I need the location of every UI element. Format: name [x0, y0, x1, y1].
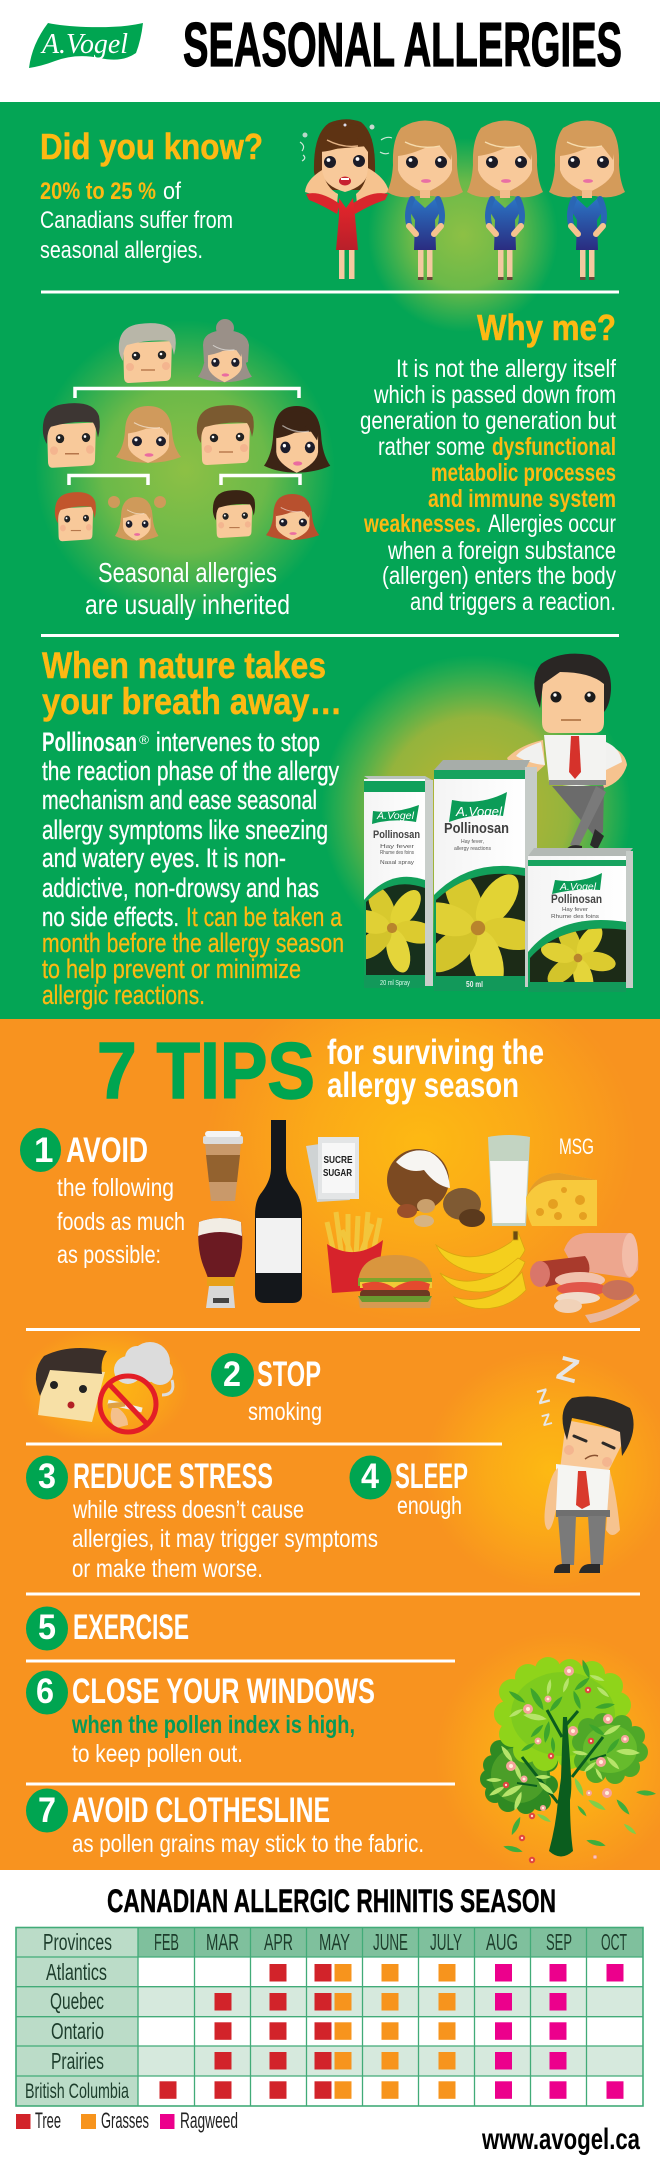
text: product description: allergy symptoms like sneezing [42, 815, 328, 845]
number badge 5 [26, 1606, 68, 1650]
row: Ontario [51, 2018, 566, 2044]
heading: 7 tips [97, 1026, 544, 1115]
heading: avoid clothesline: AVOID CLOTHESLINE [72, 1791, 330, 1830]
icon: sugar packets: SUCRE [324, 1155, 353, 1166]
product: pollinosan tablets box: Rhume des foins [551, 914, 599, 920]
tip 6: close your windows [26, 1670, 375, 1768]
panel: pollinosan [42, 645, 633, 1010]
face: boy dark hair [213, 490, 255, 538]
header band [0, 0, 660, 102]
heading: sleep: SLEEP [395, 1457, 468, 1496]
legend: Ragweed [180, 2108, 238, 2133]
text: explanation: and triggers a reaction. [410, 588, 616, 616]
icon: hamburger [358, 1255, 432, 1308]
text: statistic: Canadians suffer from [40, 207, 233, 234]
text: foods advice: the following [57, 1174, 174, 1202]
heading: when nature takes your breath away [42, 645, 342, 722]
product: pollinosan 50 ml box: Pollinosan [444, 820, 509, 837]
tip 4: sleep [350, 1349, 634, 1573]
face: girl red hair [266, 494, 319, 540]
heading: 7 tips: 7 TIPS [97, 1026, 315, 1115]
row: Ontario: Ontario [51, 2018, 104, 2044]
face: boy red hair [55, 492, 96, 541]
number badge 2: 2 [223, 1355, 241, 1394]
text: statistic: of [163, 178, 181, 205]
icon: sleepy man: Z [534, 1385, 552, 1409]
panel: orange tips background [0, 963, 660, 1882]
face: father brown hair [197, 405, 254, 465]
product: pollinosan nasal spray box: Hay fever [380, 844, 415, 850]
text: explanation: It is not the allergy itself [396, 355, 616, 383]
text: stress advice: or make them worse. [72, 1555, 263, 1583]
text: explanation: weaknesses. [363, 510, 481, 538]
heading: when nature takes your breath away: your breath away… [42, 681, 342, 722]
text: smoking: smoking [248, 1398, 322, 1426]
table header row: AUG [486, 1929, 518, 1955]
icon: coffee cup [203, 1131, 243, 1201]
text: foods advice: foods as much [57, 1208, 185, 1236]
number badge 2 [211, 1353, 254, 1397]
text: product description: intervenes to stop [156, 727, 320, 757]
text: stress advice: while stress doesn’t cause [72, 1496, 304, 1524]
product: pollinosan nasal spray box: Pollinosan [373, 829, 420, 841]
number badge 6: 6 [36, 1672, 54, 1711]
icon: beer glass [198, 1218, 242, 1308]
product: pollinosan 50 ml box: allergy reactions [454, 846, 491, 852]
heading: when nature takes your breath away: When nature takes [42, 645, 326, 686]
text: pollen index: to keep pollen out. [72, 1740, 243, 1768]
number badge 1: 1 [34, 1131, 53, 1170]
text: product description: ® [139, 733, 149, 747]
text: foods advice: as possible: [57, 1241, 161, 1269]
text: pollen index [71, 1711, 355, 1768]
number badge 1 [20, 1128, 61, 1172]
icon: flowering tree [480, 1657, 656, 1863]
text: product description: to help prevent or minimize [42, 954, 301, 984]
icon: sleepy man: Z [553, 1349, 583, 1391]
icon: standing businessman [507, 654, 627, 852]
text: statistic: seasonal allergies. [40, 237, 203, 264]
text: statistic [40, 178, 233, 264]
text: product description: and watery eyes. It is non- [42, 843, 286, 873]
text: pollen on fabric: as pollen grains may stick to the fabric. [72, 1830, 424, 1858]
legend: Grasses [101, 2108, 149, 2133]
text: explanation [360, 355, 616, 616]
heading: avoid: AVOID [66, 1131, 148, 1170]
text: product description: month before the allergy season [42, 928, 344, 958]
icon: bananas [436, 1231, 526, 1309]
product: pollinosan nasal spray box: 20 ml Spray [380, 980, 410, 987]
diagram: family tree of faces [43, 319, 330, 620]
row: Atlantics: Atlantics [46, 1959, 107, 1985]
heading: did you know: Did you know? [40, 126, 263, 167]
text: explanation: Allergies occur [488, 510, 616, 538]
heading: exercise: EXERCISE [73, 1608, 189, 1647]
logo: A.Vogel leaf [29, 23, 143, 68]
icon: cold cuts [530, 1233, 640, 1323]
number badge 3: 3 [38, 1457, 56, 1496]
text: product description: mechanism and ease seasonal [42, 785, 317, 815]
row: British Columbia [25, 2080, 624, 2103]
table header row [43, 1929, 627, 1955]
text: product description: the reaction phase of the allergy [42, 756, 339, 786]
bracket: grandparents [75, 388, 299, 398]
heading: reduce stress: REDUCE STRESS [73, 1457, 273, 1496]
product: pollinosan tablets box: A.Vogel [559, 882, 597, 893]
heading: 7 tips: allergy season [327, 1066, 519, 1105]
icon: sleepy man: Z [540, 1411, 554, 1430]
icon: french fries [327, 1212, 383, 1293]
tip 7: avoid clothesline [26, 1788, 424, 1858]
icon: surprised man with crossed-out cigarette [36, 1342, 173, 1432]
table header row: OCT [601, 1929, 627, 1955]
icon: wine bottle [255, 1120, 302, 1303]
text: explanation: dysfunctional [492, 433, 616, 461]
caption: inherited: are usually inherited [85, 589, 290, 620]
product: pollinosan 50 ml box: 50 ml [466, 980, 483, 989]
product: pollinosan nasal spray box: Rhume des foins [380, 850, 414, 856]
icon: glass of milk [488, 1135, 530, 1226]
text: pollen index: when the pollen index is high, [71, 1711, 355, 1739]
row: Prairies [51, 2048, 566, 2074]
table header row: FEB [154, 1929, 179, 1955]
product: pollinosan nasal spray box [364, 776, 433, 988]
product: pollinosan tablets box [528, 848, 633, 998]
table header row: MAY [319, 1929, 350, 1955]
row: Quebec [50, 1988, 566, 2014]
icon: coconut and nuts [387, 1149, 485, 1227]
face: girl blonde pigtails [108, 496, 166, 540]
label: MSG: MSG [559, 1134, 594, 1159]
text: stress advice [72, 1496, 378, 1583]
text: statistic: 20% to 25 % [40, 178, 156, 205]
table header row: JUNE [373, 1929, 408, 1955]
icon: woman in blue 3 [549, 120, 625, 280]
heading: stop: STOP [257, 1355, 321, 1394]
icon: woman in blue 2 [467, 120, 543, 280]
icon: woman in blue 1 [387, 120, 463, 280]
number badge 7: 7 [38, 1791, 56, 1830]
table: season by province [16, 1927, 643, 2106]
face: mother blonde [116, 406, 181, 463]
table header row: MAR [206, 1929, 239, 1955]
face: grandmother [198, 319, 252, 382]
table header row: APR [264, 1929, 293, 1955]
text: stress advice: allergies, it may trigger symptoms [72, 1525, 378, 1553]
product: pollinosan nasal spray box: A.Vogel [376, 811, 415, 822]
product: pollinosan nasal spray box: Nasal spray [380, 860, 415, 866]
icon: sleepy man [534, 1349, 634, 1573]
product: pollinosan 50 ml box [434, 760, 537, 991]
tip 3: reduce stress [26, 1456, 378, 1583]
face: mother dark hair [264, 406, 330, 473]
product: pollinosan 50 ml box: Hay fever, [461, 839, 484, 845]
tip 1: avoid [20, 1120, 640, 1323]
heading: why me: Why me? [477, 307, 616, 348]
caption: inherited: Seasonal allergies [98, 557, 277, 588]
text: product description: addictive, non-drowsy and has [42, 873, 319, 903]
row: Quebec: Quebec [50, 1988, 104, 2014]
product: pollinosan tablets box: Hay fever [562, 907, 588, 913]
tip 2: stop smoking [36, 1342, 322, 1432]
text: product description: Pollinosan [42, 727, 137, 757]
icon: woman in red, stressed [300, 119, 392, 279]
number badge 3 [26, 1456, 68, 1500]
panel: green intro background [0, 102, 660, 1019]
number badge 5: 5 [38, 1608, 56, 1647]
text: product description: It can be taken a [186, 902, 343, 932]
heading: close your windows: CLOSE YOUR WINDOWS [72, 1672, 375, 1711]
icon: sugar packets: SUGAR [323, 1168, 353, 1179]
heading: 7 tips: for surviving the [327, 1033, 544, 1072]
number badge 4: 4 [361, 1457, 379, 1496]
number badge 7 [26, 1788, 68, 1832]
text: explanation: rather some [378, 433, 485, 461]
product: pollinosan tablets box: Pollinosan [551, 892, 602, 906]
row: Atlantics [46, 1959, 624, 1985]
face: grandfather [119, 323, 176, 383]
caption: inherited [85, 557, 290, 620]
panel: why me [360, 307, 616, 616]
table header row: JULY [430, 1929, 462, 1955]
product: pollinosan 50 ml box: A.Vogel [455, 804, 503, 819]
number badge 6 [26, 1670, 68, 1714]
row: Prairies: Prairies [51, 2048, 104, 2074]
text: explanation: (allergen) enters the body [382, 562, 616, 590]
legend: Tree [35, 2108, 61, 2133]
panel: did you know [40, 119, 625, 280]
logo: A.Vogel leaf: A.Vogel [40, 28, 128, 60]
text: product description [42, 727, 344, 1010]
table header row: SEP [546, 1929, 572, 1955]
face: father dark hair [43, 403, 100, 468]
table header row: Provinces [43, 1929, 112, 1955]
text: product description: no side effects. [42, 902, 179, 932]
text: product description: allergic reactions. [42, 980, 205, 1010]
icon: sugar packets [306, 1137, 359, 1202]
bracket: right children [221, 476, 300, 485]
number badge 4 [350, 1456, 392, 1500]
tip 5: exercise [26, 1606, 189, 1650]
bracket: left children [69, 476, 148, 485]
row: British Columbia: British Columbia [25, 2080, 129, 2103]
legend [16, 2108, 238, 2133]
text: foods advice [57, 1174, 185, 1269]
text: enough: enough [397, 1492, 462, 1520]
icon: cheese wedge [526, 1173, 597, 1226]
